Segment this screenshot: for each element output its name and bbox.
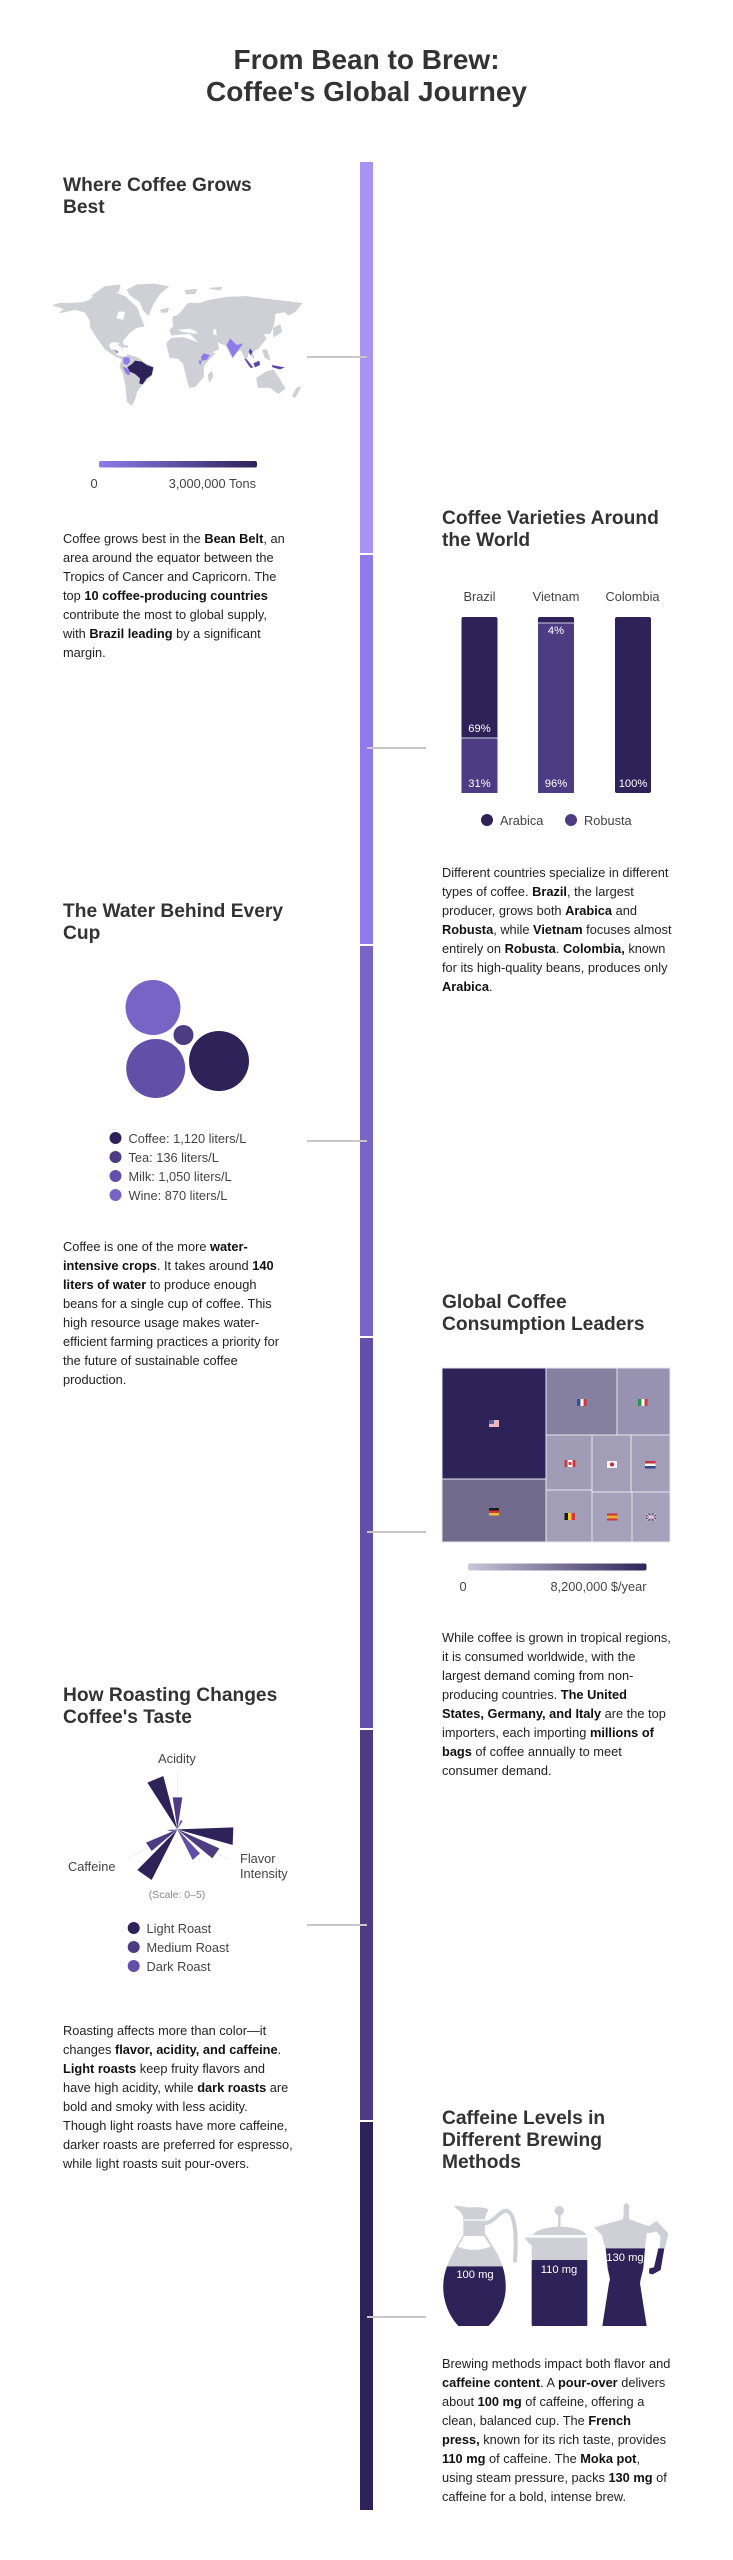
text block (442, 1630, 671, 1778)
legend: Light Roast (146, 1921, 212, 1936)
stacked bar chart: 96% (545, 778, 567, 790)
text block: Different countries specialize in different (442, 865, 669, 880)
heading (63, 175, 252, 218)
brewing pictograms: 100 mg (456, 2269, 494, 2281)
flags (489, 1399, 656, 1520)
title: Coffee's Global Journey (206, 76, 527, 107)
text block: liters of water to produce enough (63, 1277, 257, 1292)
text block: producing countries. The United (442, 1687, 627, 1702)
flag: USA (489, 1420, 499, 1427)
text block: Light roasts keep fruity flavors and (63, 2061, 265, 2076)
text block: press, known for its rich taste, provides (442, 2432, 666, 2447)
text block: Coffee grows best in the Bean Belt, an (63, 531, 285, 546)
text block: Brewing methods impact both flavor and (442, 2356, 670, 2371)
color scale (90, 461, 257, 491)
brewing pictograms: 110 mg (541, 2264, 577, 2276)
text block: entirely on Robusta. Colombia, known (442, 941, 665, 956)
radial chart: Flavor (240, 1851, 276, 1866)
text block: production. (63, 1372, 126, 1387)
heading: Methods (442, 2152, 521, 2173)
text block: darker roasts are preferred for espresso, (63, 2137, 293, 2152)
brewing pictograms: 130 mg (606, 2252, 644, 2264)
radial chart: Intensity (240, 1866, 288, 1881)
text block: Arabica. (442, 979, 493, 994)
heading (442, 1292, 645, 1335)
connector: water (307, 1140, 367, 1142)
flag: Germany (489, 1508, 499, 1516)
text block: have high acidity, while dark roasts are (63, 2080, 288, 2095)
legend: Milk: 1,050 liters/L (128, 1169, 232, 1184)
panel: consumption leaders (442, 1292, 671, 1778)
legend (110, 1131, 246, 1203)
flag: Japan (607, 1461, 617, 1468)
title: From Bean to Brew: (233, 44, 500, 75)
panel: coffee varieties (442, 508, 672, 994)
heading (63, 901, 283, 944)
text block: using steam pressure, packs 130 mg of (442, 2470, 667, 2485)
radial chart: (Scale: 0–5) (149, 1889, 205, 1901)
color scale: 3,000,000 Tons (169, 476, 256, 491)
text block: area around the equator between the (63, 550, 274, 565)
heading: the World (442, 530, 530, 551)
heading: Consumption Leaders (442, 1314, 645, 1335)
text block: consumer demand. (442, 1763, 552, 1778)
legend: Coffee: 1,120 liters/L (128, 1131, 246, 1146)
heading: Where Coffee Grows (63, 175, 252, 196)
text block: States, Germany, and Italy are the top (442, 1706, 666, 1721)
flag: France (577, 1399, 586, 1406)
color scale (459, 1564, 647, 1594)
legend: Robusta (584, 813, 633, 828)
text block: caffeine for a bold, intense brew. (442, 2489, 626, 2504)
text block: top 10 coffee-producing countries (63, 588, 268, 603)
flag: UK (646, 1514, 656, 1520)
connector: consumption (367, 1531, 426, 1533)
stacked bar chart: Brazil (464, 589, 496, 604)
stacked bar chart: Vietnam (533, 589, 579, 604)
text block: Roasting affects more than color—it (63, 2023, 267, 2038)
text block: bold and smoky with less acidity. (63, 2099, 248, 2114)
legend: Dark Roast (146, 1959, 211, 1974)
heading: Coffee's Taste (63, 1707, 192, 1728)
text block: While coffee is grown in tropical regions, (442, 1630, 671, 1645)
text block: clean, balanced cup. The French (442, 2413, 631, 2428)
text block (442, 865, 672, 994)
flag: Belgium (564, 1513, 575, 1520)
central timeline rail (360, 162, 373, 2510)
text block: with Brazil leading by a significant (62, 626, 261, 641)
brewing pictograms (443, 2203, 668, 2326)
text block: beans for a single cup of coffee. This (63, 1296, 272, 1311)
text block (62, 2023, 293, 2171)
connector: roasting (307, 1924, 367, 1926)
icon: moka pot (594, 2203, 668, 2326)
stacked bar chart: 100% (619, 778, 647, 790)
panel: water behind every cup (63, 901, 283, 1387)
treemap (442, 1368, 670, 1542)
text block (62, 531, 285, 660)
text block: importers, each importing millions of (442, 1725, 655, 1740)
text block: efficient farming practices a priority for (63, 1334, 280, 1349)
text block: caffeine content. A pour-over delivers (442, 2375, 665, 2390)
color scale: 8,200,000 $/year (550, 1579, 647, 1594)
legend: Wine: 870 liters/L (128, 1188, 227, 1203)
flag: Italy (638, 1399, 648, 1406)
text block: Though light roasts have more caffeine, (63, 2118, 288, 2133)
connector: map (307, 356, 367, 358)
text block: the future of sustainable coffee (63, 1353, 238, 1368)
stacked bar chart: 69% (468, 723, 491, 735)
flag: Spain (607, 1514, 618, 1520)
text block: margin. (63, 645, 106, 660)
text block: bags of coffee annually to meet (442, 1744, 622, 1759)
flag: Canada (564, 1460, 576, 1467)
heading: How Roasting Changes (63, 1685, 277, 1706)
text block: contribute the most to global supply, (63, 607, 267, 622)
bubble chart (126, 980, 249, 1098)
panel: caffeine levels (442, 2108, 670, 2504)
title (206, 44, 527, 107)
text block: while light roasts suit pour-overs. (62, 2156, 249, 2171)
panel: where coffee grows (53, 175, 302, 660)
heading: Best (63, 197, 105, 218)
icon: carafe (443, 2206, 516, 2326)
text block: it is consumed worldwide, with the (442, 1649, 635, 1664)
stacked bar chart: 4% (548, 625, 564, 637)
heading (63, 1685, 277, 1728)
heading: Global Coffee (442, 1292, 567, 1313)
stacked bar chart (462, 589, 660, 793)
text block (442, 2356, 670, 2504)
text block: for its high-quality beans, produces only (442, 960, 668, 975)
legend: Tea: 136 liters/L (128, 1150, 219, 1165)
color scale: 0 (90, 476, 98, 491)
color scale: 0 (459, 1579, 467, 1594)
radial chart: Acidity (158, 1751, 196, 1766)
text block: producer, grows both Arabica and (442, 903, 637, 918)
heading: Cup (63, 923, 100, 944)
heading: Different Brewing (442, 2130, 602, 2151)
text block: Tropics of Cancer and Capricorn. The (63, 569, 276, 584)
flag: Netherlands (645, 1461, 656, 1468)
text block: intensive crops. It takes around 140 (63, 1258, 274, 1273)
radial chart (68, 1751, 288, 1901)
legend (128, 1921, 229, 1974)
text block: changes flavor, acidity, and caffeine. (63, 2042, 281, 2057)
heading: The Water Behind Every (63, 901, 283, 922)
text block: Coffee is one of the more water- (63, 1239, 248, 1254)
text block (63, 1239, 280, 1387)
world map (53, 284, 302, 405)
legend: Medium Roast (146, 1940, 229, 1955)
stacked bar chart: Colombia (605, 589, 660, 604)
stacked bar chart: 31% (468, 778, 491, 790)
text block: Robusta, while Vietnam focuses almost (442, 922, 672, 937)
connector: caffeine (367, 2316, 426, 2318)
radial chart: Caffeine (68, 1859, 115, 1874)
heading: Caffeine Levels in (442, 2108, 605, 2129)
heading (442, 508, 659, 551)
text block: high resource usage makes water- (63, 1315, 259, 1330)
text block: largest demand coming from non- (442, 1668, 633, 1683)
text block: types of coffee. Brazil, the largest (442, 884, 634, 899)
icon: french press (524, 2206, 587, 2326)
heading (442, 2108, 605, 2173)
legend: Arabica (500, 813, 544, 828)
legend (481, 813, 633, 828)
text block: about 100 mg of caffeine, offering a (442, 2394, 645, 2409)
connector: varieties (367, 747, 426, 749)
text block: 110 mg of caffeine. The Moka pot, (442, 2451, 640, 2466)
panel: roasting (62, 1685, 293, 2171)
heading: Coffee Varieties Around (442, 508, 659, 529)
